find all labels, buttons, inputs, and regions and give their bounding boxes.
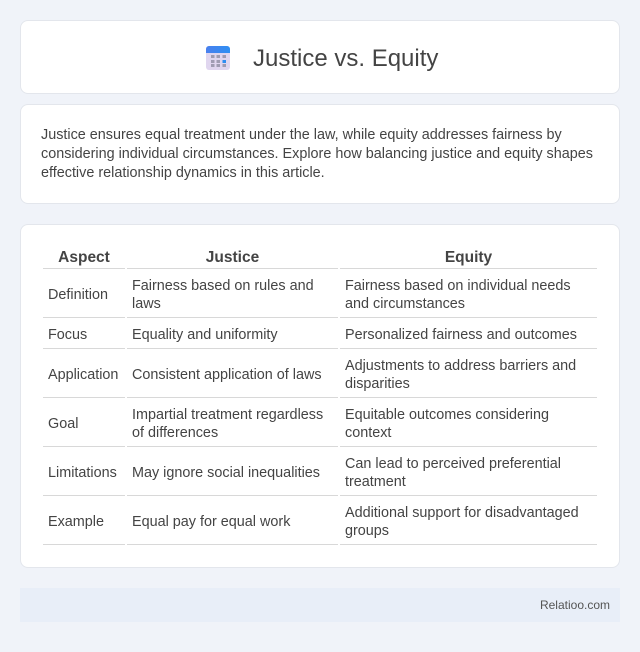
row: definition: laws: [132, 296, 161, 312]
icon: calendar: [206, 46, 230, 70]
row: focus: Equality and uniformity: [132, 327, 278, 343]
table header: Aspect: [58, 249, 110, 266]
intro text: [41, 127, 593, 181]
row: example: Example: [48, 514, 104, 530]
panel: introduction: [20, 104, 620, 204]
row: goal: [43, 407, 597, 447]
comparison table: [43, 249, 597, 545]
intro text: Justice ensures equal treatment under the law, while equity addresses fairness by: [41, 127, 562, 143]
table header: [43, 249, 597, 269]
intro text: effective relationship dynamics in this article.: [41, 165, 325, 181]
title: Justice vs. Equity: [253, 45, 438, 72]
row: definition: and circumstances: [345, 296, 465, 312]
row: focus: [43, 327, 597, 349]
row: application: Consistent application of laws: [132, 367, 322, 383]
row: limitations: Limitations: [48, 465, 117, 481]
intro text: considering individual circumstances. Explore how balancing justice and equity shapes: [41, 146, 593, 162]
footer credit: Relatioo.com: [540, 598, 610, 612]
row: example: Additional support for disadvantaged: [345, 505, 579, 521]
row: goal: Goal: [48, 416, 78, 432]
table header: Justice: [206, 249, 259, 266]
row: limitations: May ignore social inequalities: [132, 465, 320, 481]
row: limitations: treatment: [345, 474, 406, 490]
row: goal: context: [345, 425, 391, 441]
row: goal: Equitable outcomes considering: [345, 407, 549, 423]
table header: Equity: [445, 249, 492, 266]
row: application: disparities: [345, 376, 410, 392]
row: goal: of differences: [132, 425, 218, 441]
row: example: groups: [345, 523, 389, 539]
row: definition: [43, 278, 597, 318]
row: definition: Fairness based on rules and: [132, 278, 314, 294]
row: example: Equal pay for equal work: [132, 514, 290, 530]
row: definition: Definition: [48, 287, 108, 303]
row: application: Application: [48, 367, 118, 383]
row: application: Adjustments to address barriers and: [345, 358, 576, 374]
row: focus: Personalized fairness and outcomes: [345, 327, 577, 343]
row: focus: Focus: [48, 327, 87, 343]
panel: title card: [20, 20, 620, 94]
panel: comparison table card: [20, 224, 620, 568]
row: goal: Impartial treatment regardless: [132, 407, 323, 423]
row: definition: Fairness based on individual needs: [345, 278, 571, 294]
row: limitations: [43, 456, 597, 496]
row: limitations: Can lead to perceived preferential: [345, 456, 561, 472]
row: application: [43, 358, 597, 398]
footer bar: [20, 588, 620, 622]
